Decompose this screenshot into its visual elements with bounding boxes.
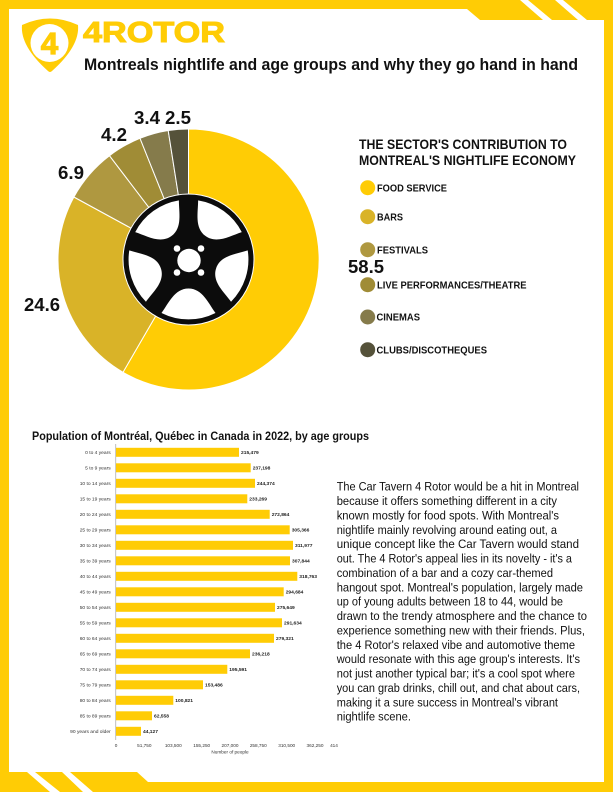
age group labels: 50 to 54 years xyxy=(80,605,111,611)
x axis ticks: 414 xyxy=(330,743,338,748)
x axis ticks: 207,000 xyxy=(222,743,239,748)
body paragraph: making it a sure success in Montreal's vibrant xyxy=(337,695,559,709)
bar value labels: 272,864 xyxy=(272,512,290,518)
slice: festivals 6.9 xyxy=(74,156,188,260)
age group labels: 90 years and older xyxy=(70,729,111,735)
pie value labels: 4.2 xyxy=(101,125,127,145)
body paragraph: nightlife scene. xyxy=(337,710,411,724)
body paragraph: The Car Tavern 4 Rotor would be a hit in Montreal xyxy=(337,480,579,494)
bar value labels: 236,218 xyxy=(252,652,270,658)
bars xyxy=(116,448,297,736)
bar value labels: 237,198 xyxy=(253,466,271,472)
body paragraph: known mostly for food spots. With Montreal's xyxy=(337,508,559,522)
age group labels: 20 to 24 years xyxy=(80,512,111,518)
slice: food service 58.5 xyxy=(123,129,319,390)
body paragraph: the 4 Rotor's relaxed vibe and automotive theme xyxy=(337,638,575,652)
bar chart: population by age group xyxy=(70,444,338,754)
age group labels: 5 to 9 years xyxy=(85,466,111,472)
body paragraph: unique concept like the Car Tavern would stand xyxy=(337,537,579,551)
age group labels: 30 to 34 years xyxy=(80,543,111,549)
body paragraph: not just another typical bar; it's a cool spot where xyxy=(337,667,575,681)
legend: FESTIVALS xyxy=(377,245,428,256)
age group labels: 40 to 44 years xyxy=(80,574,111,580)
body paragraph: because it offers something different in a city xyxy=(337,494,558,508)
legend: LIVE PERFORMANCES/THEATRE xyxy=(377,280,527,291)
title: Montreals nightlife and age groups and why they go hand in hand xyxy=(84,55,578,74)
x axis ticks: 258,750 xyxy=(250,743,267,748)
slice: bars 24.6 xyxy=(58,197,188,372)
body paragraph: experience something new with their friends. Plus, xyxy=(337,624,585,638)
age group labels: 15 to 19 years xyxy=(80,496,111,502)
bar value labels: 279,321 xyxy=(276,636,294,642)
body paragraph: would resonate with this age group's interests. It's xyxy=(336,652,580,666)
body paragraph: hangout spot. Montreal's population, largely made xyxy=(337,580,583,594)
bar value labels: 100,821 xyxy=(175,698,193,704)
pie value labels: 2.5 xyxy=(165,108,191,128)
legend: CINEMAS xyxy=(376,313,420,324)
age group labels: 55 to 59 years xyxy=(80,620,111,626)
age group labels: 45 to 49 years xyxy=(80,590,111,596)
age group labels: 60 to 64 years xyxy=(80,636,111,642)
bar value labels: 233,269 xyxy=(249,496,267,502)
logo: shield badge with number 4: 4 xyxy=(41,26,59,61)
legend: CLUBS/DISCOTHEQUES xyxy=(376,345,487,356)
x axis ticks xyxy=(115,743,338,748)
pie value labels: 24.6 xyxy=(24,295,60,315)
age group labels: 85 to 89 years xyxy=(80,714,111,720)
legend: FOOD SERVICE xyxy=(377,183,447,194)
body paragraph: you can grab drinks, chill out, and chat about cars, xyxy=(337,681,580,695)
pie value labels: 58.5 xyxy=(348,257,384,277)
bar value labels: 294,684 xyxy=(286,590,304,596)
pie value labels: 3.4 xyxy=(134,108,160,128)
bar value labels: 244,374 xyxy=(257,481,275,487)
pie value labels: 6.9 xyxy=(58,163,84,183)
bar value labels: 305,366 xyxy=(292,528,310,534)
bar value labels xyxy=(143,450,317,735)
bar value labels: 307,844 xyxy=(292,558,310,564)
age group labels: 80 to 84 years xyxy=(80,698,111,704)
age group labels: 75 to 79 years xyxy=(80,682,111,688)
bar value labels: 318,763 xyxy=(299,574,317,580)
logo wordmark: 4ROTOR: 4ROTOR xyxy=(83,17,225,49)
x axis ticks: 0 xyxy=(115,743,118,748)
x axis ticks: 51,750 xyxy=(137,743,152,748)
bar value labels: 275,649 xyxy=(277,605,295,611)
legend heading: THE SECTOR'S CONTRIBUTION TO xyxy=(359,137,567,152)
age group labels: 70 to 74 years xyxy=(80,667,111,673)
icon: alloy wheel xyxy=(122,194,254,326)
legend heading: MONTREAL'S NIGHTLIFE ECONOMY xyxy=(359,153,576,168)
logo: shield badge with number 4 xyxy=(22,18,78,72)
body paragraph: nightlife mainly revolving around eating out, a xyxy=(337,523,557,537)
bar value labels: 311,977 xyxy=(295,543,313,549)
age group labels: 65 to 69 years xyxy=(80,652,111,658)
slice: clubs 2.5 xyxy=(168,129,188,260)
body paragraph: combination of a bar and a cozy car-themed xyxy=(337,566,553,580)
slice: cinemas 3.4 xyxy=(140,130,188,260)
age group labels: 25 to 29 years xyxy=(80,528,111,534)
body paragraph: drawn to the trendy atmosphere and the chance to xyxy=(337,609,587,623)
body paragraph: up of young adults between 18 to 44, would be xyxy=(337,595,563,609)
x axis title: Number of people xyxy=(211,750,249,754)
legend xyxy=(359,137,576,357)
bar value labels: 215,479 xyxy=(241,450,259,456)
slice: live performances 4.2 xyxy=(110,138,188,260)
age group labels: 35 to 39 years xyxy=(80,558,111,564)
legend: BARS xyxy=(377,212,403,223)
bar value labels: 44,127 xyxy=(143,729,158,735)
x axis ticks: 155,250 xyxy=(193,743,211,748)
body paragraph: out. The 4 Rotor's appeal lies in its novelty - it's a xyxy=(337,552,572,566)
x axis ticks: 103,500 xyxy=(165,743,182,748)
age group labels: 10 to 14 years xyxy=(80,481,111,487)
chart title: Population of Montréal, Québec in Canada in 2022, by age groups xyxy=(32,429,369,443)
bar value labels: 153,486 xyxy=(205,682,223,688)
bar value labels: 291,634 xyxy=(284,620,302,626)
age group labels: 0 to 4 years xyxy=(85,450,111,456)
pie chart: sector contribution with wheel at centre xyxy=(58,129,319,390)
pie value labels xyxy=(24,108,384,315)
bar value labels: 62,558 xyxy=(154,714,169,720)
age group labels xyxy=(70,450,111,735)
x axis ticks: 310,500 xyxy=(278,743,296,748)
bar value labels: 195,591 xyxy=(229,667,247,673)
x axis ticks: 362,250 xyxy=(307,743,324,748)
